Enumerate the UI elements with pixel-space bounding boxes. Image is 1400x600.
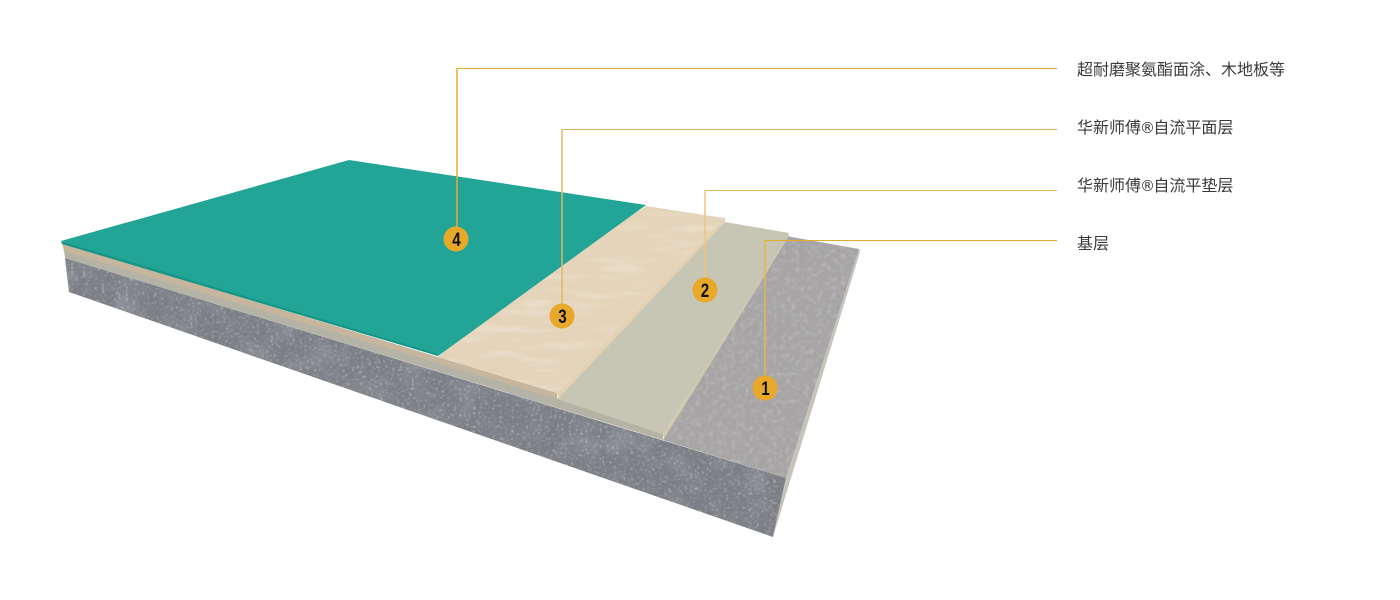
marker 2: 2 (701, 279, 709, 301)
marker 4: 4 (452, 228, 461, 250)
leader line 4 (457, 68, 1057, 230)
slab front face (60, 250, 790, 540)
layer 1: base top surface (660, 230, 860, 480)
marker 1: 1 (761, 377, 770, 399)
layer 3: self-levelling top coat (62, 205, 727, 401)
marker 3 (550, 304, 574, 328)
label 2: 华新师傅®自流平垫层 (1077, 177, 1233, 195)
label 4: 超耐磨聚氨酯面涂、木地板等 (1077, 61, 1285, 79)
leader line 2 (705, 190, 1057, 280)
leader line 3 (562, 129, 1057, 306)
slab right side strip (773, 249, 860, 537)
marker 3: 3 (558, 305, 567, 327)
top coat surface (438, 206, 724, 393)
marker 2 (692, 278, 718, 302)
marker 1 (752, 376, 778, 400)
underlayer top surface (557, 222, 789, 434)
underlayer front band (64, 250, 663, 440)
label 1: 基层 (1077, 235, 1109, 253)
leader line 1 (765, 240, 1057, 378)
label 3: 华新师傅®自流平面层 (1077, 119, 1233, 137)
layer 4: green polyurethane coating (61, 160, 646, 356)
underlayer right edge highlight (663, 233, 789, 439)
concrete floor slab (60, 230, 860, 540)
layer 2: self-levelling underlayer (64, 222, 789, 440)
top coat right edge (557, 217, 725, 399)
marker 4 (444, 226, 468, 252)
top coat front band (62, 243, 557, 399)
